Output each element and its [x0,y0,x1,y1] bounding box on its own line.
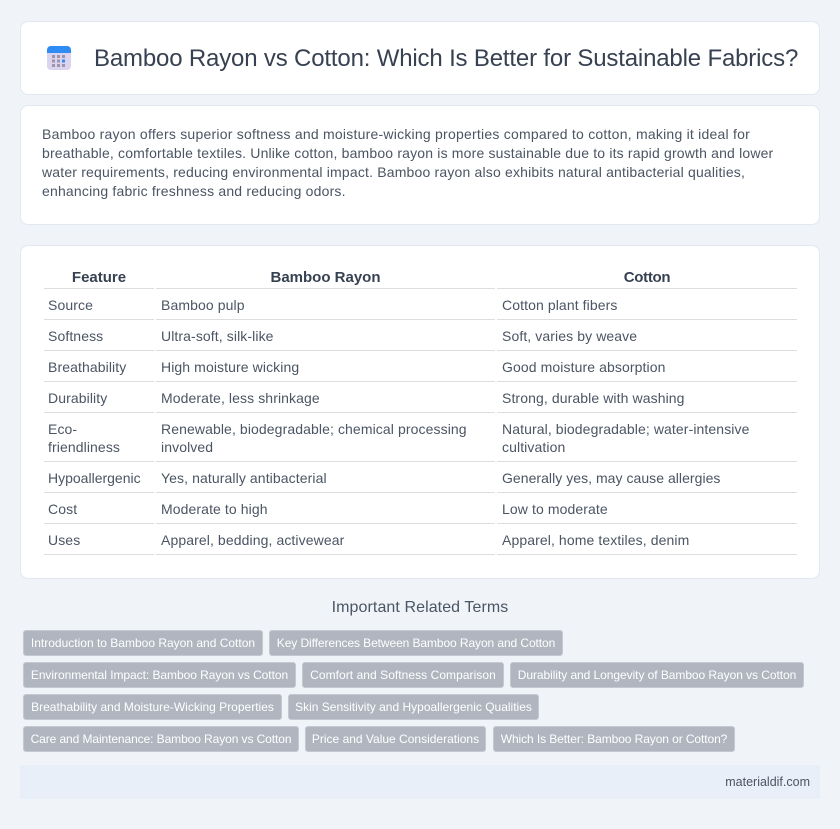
comparison table: Apparel, bedding, activewear [161,532,344,548]
row: eco-friendliness [48,421,120,455]
intro text [42,126,773,199]
comparison table: Natural, biodegradable; water-intensive [502,421,750,437]
comparison table: Yes, naturally antibacterial [161,470,327,486]
related term tags: Environmental Impact: Bamboo Rayon vs Cotton [31,668,288,682]
related term tags: Comfort and Softness Comparison [310,668,496,682]
table header: Cotton [624,269,670,286]
comparison table: Renewable, biodegradable; chemical processing [161,421,467,437]
header card [20,21,820,95]
intro text: Bamboo rayon offers superior softness and moisture-wicking properties compared to cotton, making it ideal for [42,126,750,142]
comparison table: Apparel, home textiles, denim [502,532,689,548]
related term tags: Breathability and Moisture-Wicking Properties [31,700,274,714]
row: cost: Cost [48,501,77,517]
intro text: enhancing fabric freshness and reducing odors. [42,183,346,199]
comparison table [44,269,797,555]
title: Bamboo Rayon vs Cotton: Which Is Better for Sustainable Fabrics? [94,45,798,72]
comparison table: Strong, durable with washing [502,390,685,406]
related term tags [23,630,804,752]
related term tags: Which Is Better: Bamboo Rayon or Cotton? [501,732,727,746]
table header: Feature [72,269,126,286]
table header [72,269,670,286]
intro card [20,105,820,225]
comparison table: Generally yes, may cause allergies [502,470,720,486]
related term tags: Durability and Longevity of Bamboo Rayon vs Cotton [518,668,796,682]
comparison table: Bamboo pulp [161,297,245,313]
related term tags: Price and Value Considerations [312,732,479,746]
comparison table: Good moisture absorption [502,359,666,375]
comparison table: Moderate to high [161,501,268,517]
comparison table: Cotton plant fibers [502,297,618,313]
comparison table: Soft, varies by weave [502,328,637,344]
row: eco-friendliness: friendliness [48,439,120,455]
comparison table: Moderate, less shrinkage [161,390,320,406]
row: source: Source [48,297,93,313]
related terms heading: Important Related Terms [332,599,508,616]
icon: calendar [47,46,71,70]
footer site name: materialdif.com [725,775,810,789]
row: breathability: Breathability [48,359,126,375]
table header: Bamboo Rayon [270,269,380,286]
row: softness: Softness [48,328,103,344]
comparison table: Low to moderate [502,501,608,517]
row: hypoallergenic: Hypoallergenic [48,470,141,486]
intro text: water requirements, reducing environmental impact. Bamboo rayon also exhibits natural antibacterial qualities, [42,164,745,180]
comparison table: cultivation [502,439,565,455]
related term tags: Care and Maintenance: Bamboo Rayon vs Cotton [31,732,291,746]
intro text: breathable, comfortable textiles. Unlike cotton, bamboo rayon is more sustainable due to its rapid growth and lower [42,145,773,161]
row: uses: Uses [48,532,80,548]
table card [20,245,820,579]
related term tags: Introduction to Bamboo Rayon and Cotton [31,636,255,650]
row: durability: Durability [48,390,107,406]
row: eco-friendliness: Eco- [48,421,77,437]
comparison table: Ultra-soft, silk-like [161,328,274,344]
related term tags: Key Differences Between Bamboo Rayon and Cotton [277,636,555,650]
related term tags: Skin Sensitivity and Hypoallergenic Qualities [295,700,532,714]
comparison table: High moisture wicking [161,359,299,375]
footer bar [20,765,820,799]
comparison table: involved [161,439,213,455]
